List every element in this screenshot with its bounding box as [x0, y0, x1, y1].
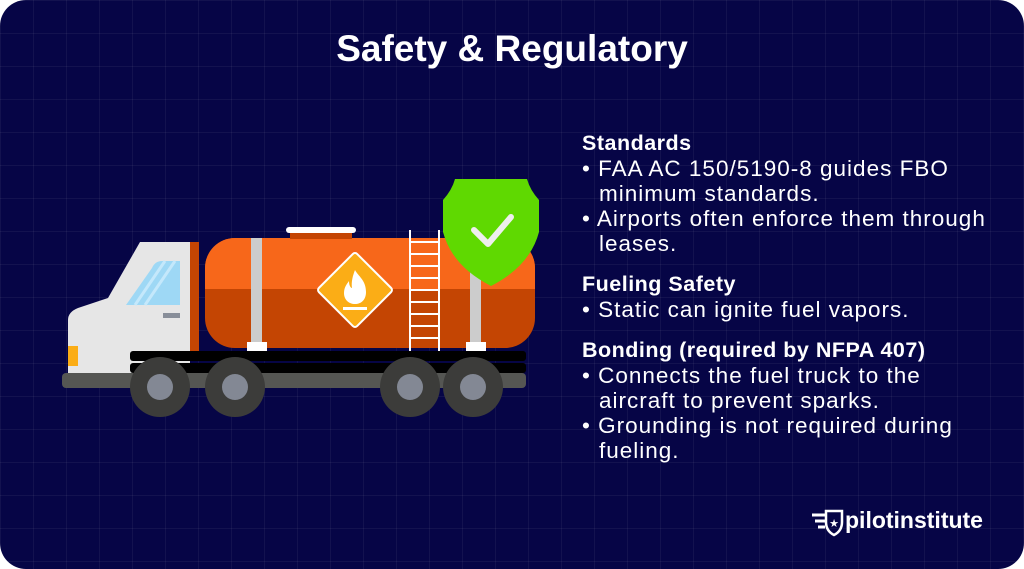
logo: pilotinstitute [845, 507, 983, 533]
section: bonding: fueling. [599, 438, 680, 463]
section: standards [582, 131, 986, 256]
section: fueling safety: Fueling Safety [582, 272, 736, 296]
section: fueling safety [582, 272, 910, 322]
section: standards: leases. [599, 231, 677, 256]
section: standards: Standards [582, 131, 692, 155]
logo icon: ★ [829, 517, 839, 530]
section: bonding: Bonding (required by NFPA 407) [582, 338, 926, 362]
text block [582, 131, 986, 463]
section: fueling safety: • Static can ignite fuel vapors. [582, 297, 910, 322]
title: Safety & Regulatory [336, 28, 688, 69]
section: bonding [582, 338, 953, 463]
section: standards: minimum standards. [599, 181, 820, 206]
tank [205, 227, 535, 351]
icon: flammable diamond [317, 252, 393, 328]
section: standards: • FAA AC 150/5190-8 guides FBO [582, 156, 949, 181]
wheels [130, 357, 503, 417]
section: bonding: • Grounding is not required during [582, 413, 953, 438]
icon: green shield with check [443, 179, 539, 286]
logo icon [812, 511, 842, 535]
section: bonding: • Connects the fuel truck to the [582, 363, 921, 388]
chassis [62, 351, 526, 388]
ladder [410, 230, 439, 353]
section: bonding: aircraft to prevent sparks. [599, 388, 880, 413]
cab [68, 242, 199, 373]
section: standards: • Airports often enforce them through [582, 206, 986, 231]
